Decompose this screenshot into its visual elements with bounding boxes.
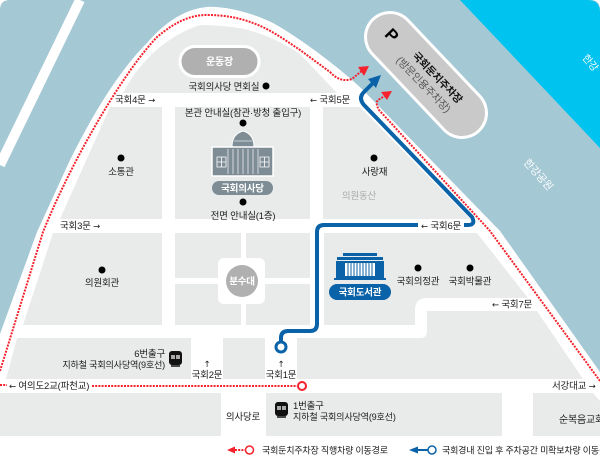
icon: subway train exit 6 xyxy=(169,351,182,366)
label: 여의도2교: ← 여의도2교(파천교) xyxy=(9,380,89,392)
shape: fountain: 분수대 xyxy=(229,276,255,288)
shape: fountain xyxy=(218,258,265,304)
panel: Sarangjae block xyxy=(323,107,470,219)
label: gate 2: 국회2문 xyxy=(192,370,223,381)
icon: parking lot: (방문인용주차장) xyxy=(393,55,453,115)
panel: bottom right block xyxy=(533,393,600,436)
label: gate 6: ← 국회6문 xyxy=(421,221,462,232)
label: 의원동산: 의원동산 xyxy=(342,191,377,202)
shape: sports field xyxy=(180,46,259,76)
panel: subway exit 6 block xyxy=(6,338,191,379)
panel: library block xyxy=(324,233,528,325)
panel: top gray block with sports field xyxy=(123,25,337,93)
label: gate 1: 국회1문 xyxy=(266,370,297,381)
panel: fountain blocks xyxy=(175,233,310,325)
label: 국회박물관 xyxy=(449,264,492,288)
label: 의원회관: 의원회관 xyxy=(85,278,120,289)
label: subway exit 6: 6번출구 xyxy=(134,349,165,360)
icon: parking lot xyxy=(381,25,465,115)
panel: lower right block xyxy=(297,311,583,379)
legend: red route: 국회둔치주차장 직행차량 이동경로 xyxy=(262,444,388,456)
label: gate 2: ↑ xyxy=(204,360,210,370)
label: 사랑재 xyxy=(362,154,387,178)
label: main information desk xyxy=(185,107,301,126)
route: red dotted route along perimeter to upper arrow xyxy=(0,15,369,371)
label: front information desk: 전면 안내실(1층) xyxy=(211,211,275,222)
road: diagonal white road xyxy=(0,0,80,165)
label: subway exit 1: 지하철 국회의사당역(9호선) xyxy=(293,412,396,422)
shape: sports field: 운동장 xyxy=(206,56,233,68)
label: front information desk xyxy=(211,198,275,222)
label: gate 4: 국회4문 → xyxy=(115,95,155,106)
label: 사랑재: 사랑재 xyxy=(362,166,387,178)
label: subway exit 6: 지하철 국회의사당역(9호선) xyxy=(62,360,165,370)
label: gate 3: 국회3문 → xyxy=(60,221,100,232)
panel: main assembly block xyxy=(175,107,310,219)
label: 의원회관 xyxy=(85,266,120,289)
label: gate 7: ← 국회7문 xyxy=(492,300,533,310)
label: main information desk: 본관 안내실(참관·방청 출입구) xyxy=(185,107,301,119)
route: blue route from gate 1 to parking xyxy=(276,75,473,352)
label: subway exit 6 xyxy=(62,349,165,370)
icon: parking lot: P xyxy=(381,25,402,46)
label: 운동장 side reception: 국회의사당 면회실 xyxy=(188,82,259,93)
label: 의사당로: 의사당로 xyxy=(226,412,261,423)
panel: bottom center block xyxy=(266,393,502,436)
badge: 국회도서관: 국회도서관 xyxy=(339,286,382,298)
panel: gate 1 block xyxy=(223,338,265,379)
route: red dotted route along east edge to lower arrow xyxy=(377,91,600,381)
label: subway exit 1: 1번출구 xyxy=(293,401,324,412)
panel: Sotong hall block xyxy=(60,107,162,219)
label: gate 2 xyxy=(192,360,223,381)
icon: subway train exit 1 xyxy=(275,402,288,417)
label: 국회박물관: 국회박물관 xyxy=(449,276,492,288)
icon: national assembly building xyxy=(212,131,273,176)
panel: members hall block xyxy=(23,233,162,325)
badge: 국회의사당 xyxy=(212,181,273,195)
label: gate 5: ← 국회5문 xyxy=(310,95,351,106)
badge: 국회도서관 xyxy=(329,284,391,300)
label: 국회의정관 xyxy=(397,264,440,288)
label: gate 1: ↑ xyxy=(278,360,284,370)
badge: 국회의사당: 국회의사당 xyxy=(221,182,264,194)
label: gate 1 xyxy=(266,360,297,381)
label: 서강대교: 서강대교 → xyxy=(552,381,596,392)
route: red dotted road route xyxy=(0,382,306,390)
label: 소통관: 소통관 xyxy=(108,167,134,178)
panel: bottom left block xyxy=(0,393,221,436)
panel: Han river xyxy=(460,0,600,148)
label: 한강공원: 한강공원 xyxy=(521,157,555,193)
icon: national assembly library xyxy=(334,253,386,280)
label: subway exit 1 xyxy=(293,401,396,422)
icon: parking lot: 국회둔치주차장 xyxy=(410,49,465,106)
label: 국회의정관: 국회의정관 xyxy=(397,276,440,288)
label: 한강: 한강 xyxy=(580,52,600,74)
label: 소통관 xyxy=(108,154,134,178)
